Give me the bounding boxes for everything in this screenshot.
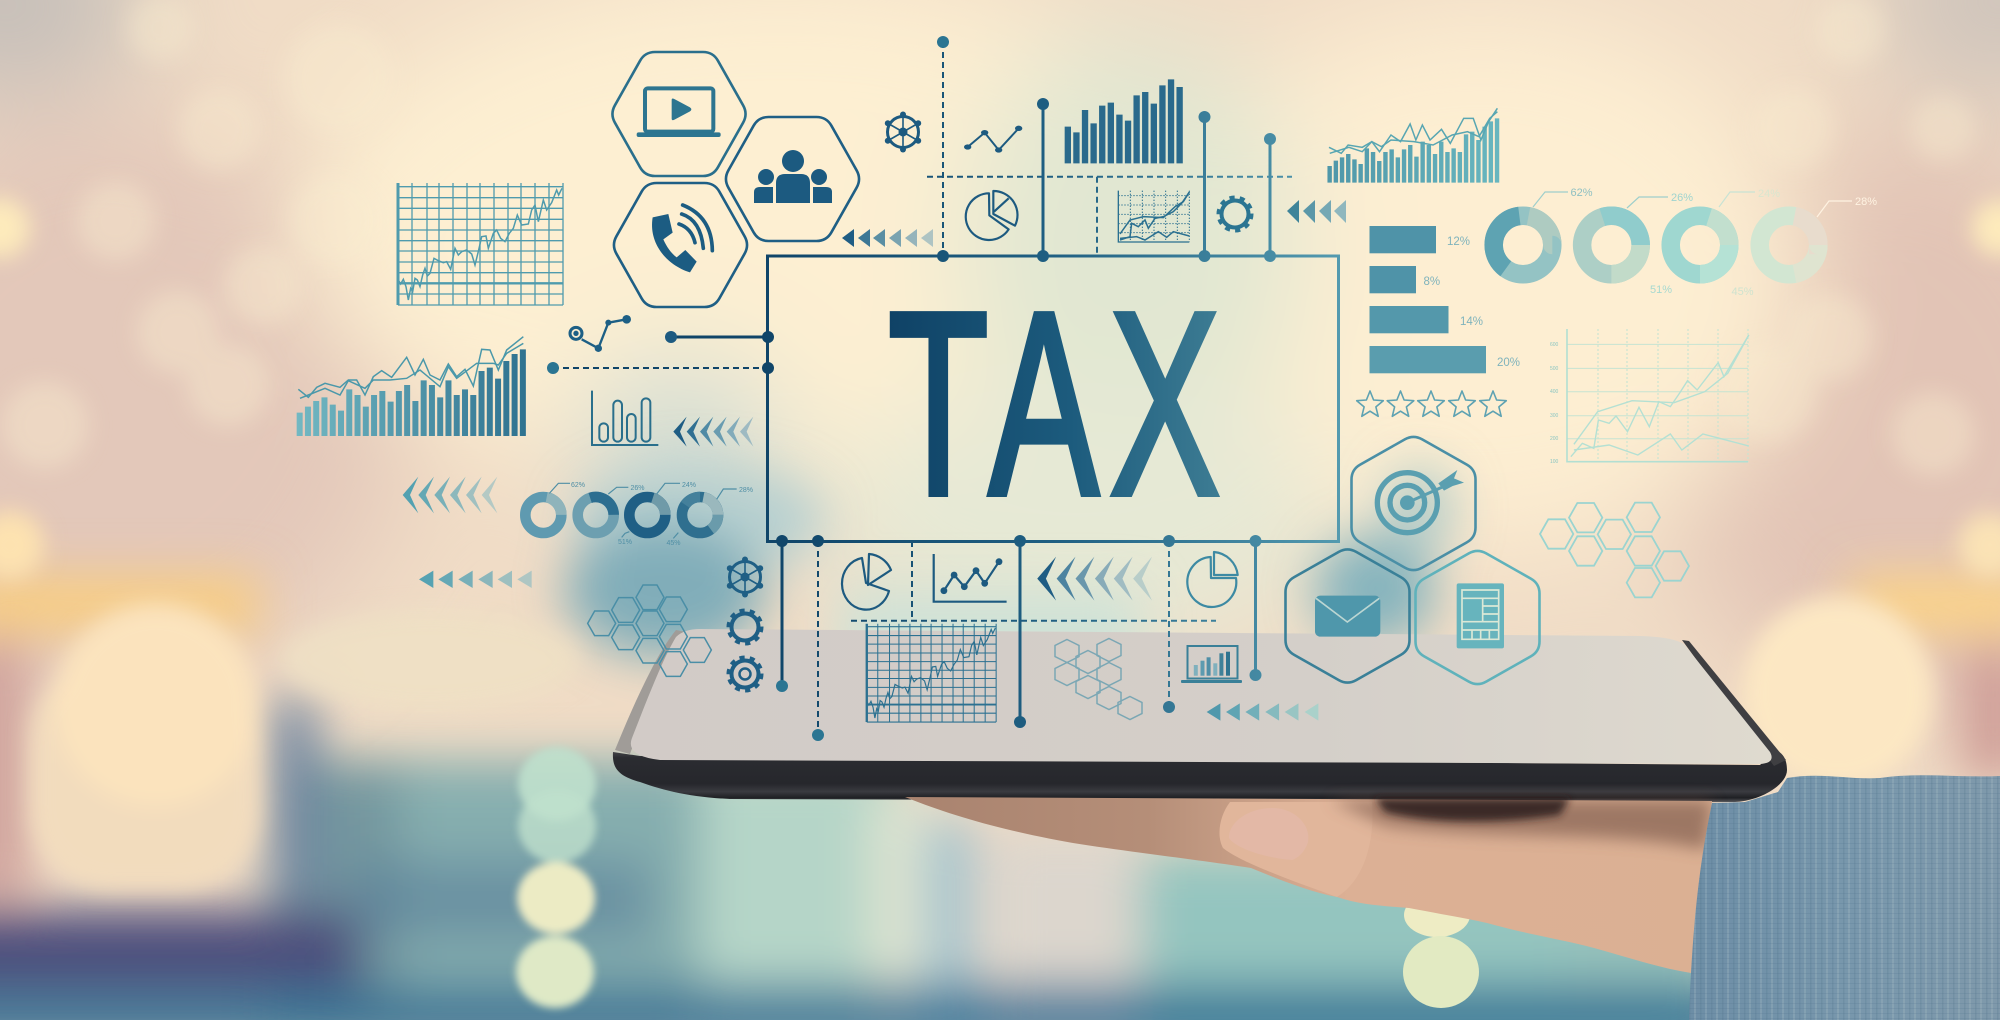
horizontal bar chart: 20% <box>1497 357 1520 369</box>
donut labels: large: 26% <box>1671 192 1693 204</box>
line chart: right: 100 <box>1550 459 1559 465</box>
hexagon cluster: right <box>1540 503 1689 597</box>
hexagon: video <box>612 52 746 176</box>
icon: wheel gear bottom <box>727 556 763 598</box>
connector end dots <box>547 36 949 741</box>
line chart: right: 600 <box>1550 342 1559 348</box>
donut labels: large: 28% <box>1855 196 1877 208</box>
donut labels: small: 28% <box>739 487 753 494</box>
icon: pie chart left on box bottom <box>842 554 891 610</box>
grid line chart: on tablet <box>867 624 996 722</box>
icon: laptop play <box>637 88 721 137</box>
bar and line chart: left <box>297 337 526 436</box>
triangles: top row <box>842 229 933 247</box>
bokeh column by the tablet <box>516 747 596 1008</box>
chevrons: far left <box>403 477 497 513</box>
donut 24% <box>629 497 665 533</box>
background wash layers <box>0 0 2000 710</box>
sleeve <box>1689 775 2000 1020</box>
donut labels: large: 45% <box>1732 286 1754 298</box>
line chart: right: 200 <box>1550 436 1559 442</box>
icon: line chart with axes <box>934 554 1007 602</box>
hexagon: tablet <box>1416 551 1540 684</box>
tablet side bezel <box>615 630 686 754</box>
background lower tones <box>0 465 2000 1020</box>
hexagon: phone <box>614 183 747 307</box>
donut labels: small: 51% <box>618 539 632 546</box>
icon: gear ring <box>728 610 762 644</box>
horizontal bar chart: 12% <box>1447 236 1470 248</box>
line chart: right <box>1550 329 1749 465</box>
icon: wheel gear top <box>885 112 921 152</box>
chevrons: on tablet <box>1037 557 1152 601</box>
donut labels: small: 45% <box>666 540 681 547</box>
hexagon cluster: tablet <box>1055 638 1142 720</box>
icon: phone handset <box>652 205 712 272</box>
icon: envelope <box>1315 596 1380 637</box>
icon: route path <box>570 315 631 352</box>
shadow under tablet <box>1375 798 1570 821</box>
tablet dark edge band <box>613 750 1787 802</box>
connector dots <box>762 98 1276 728</box>
icon: small line chart <box>964 126 1022 153</box>
donut labels: large <box>1533 187 1877 298</box>
line chart: right: 300 <box>1550 413 1559 419</box>
donut charts: large <box>1494 208 1818 282</box>
hand <box>905 797 1712 973</box>
line chart: right: 400 <box>1550 389 1559 395</box>
horizontal bar chart: 8% <box>1424 276 1440 288</box>
icon: gear with center ring <box>728 658 762 690</box>
sleeve knit texture <box>1689 775 2000 1020</box>
donut labels: small: 24% <box>682 482 696 489</box>
hexagon: target <box>1352 437 1476 570</box>
donut labels: large: 24% <box>1758 188 1780 200</box>
donut 26% <box>1574 208 1648 282</box>
line chart: right: 500 <box>1550 366 1559 372</box>
tablet right bezel <box>1682 640 1786 766</box>
donut 62% <box>1494 216 1552 274</box>
donut labels: small: 62% <box>571 482 585 489</box>
thumb <box>1219 802 1373 897</box>
icon: target with arrow <box>1377 470 1464 533</box>
triangles: top right row <box>1287 200 1346 223</box>
mini line chart <box>1118 191 1189 242</box>
TAX frame and connectors <box>547 36 1338 741</box>
donut 28% <box>682 497 718 533</box>
thumbnail <box>1229 808 1308 860</box>
donut 62% <box>525 497 561 533</box>
donut 24% <box>1671 216 1729 274</box>
triangles: on tablet <box>1207 703 1318 721</box>
hexagon: team <box>726 117 859 241</box>
hexagon cluster: left <box>588 585 711 676</box>
sleeve fabric <box>1689 775 2000 1020</box>
horizontal bar chart <box>1370 226 1520 373</box>
frame <box>768 256 1338 542</box>
icon: laptop with bars <box>1181 646 1242 683</box>
solid connectors <box>671 104 1270 722</box>
chevrons: left of box <box>673 417 753 447</box>
graphics overlay <box>297 36 1877 741</box>
bar and line chart: top right <box>1327 108 1499 183</box>
dashed connectors <box>553 42 1292 735</box>
hexagon: mail <box>1286 549 1410 683</box>
icon: rounded bar chart <box>592 391 658 445</box>
grid line chart: upper left <box>398 183 563 305</box>
icon: people <box>754 150 832 203</box>
donut labels: large: 51% <box>1650 284 1672 296</box>
five star rating <box>1357 391 1506 416</box>
donut labels: small <box>549 482 753 547</box>
tablet screen <box>631 629 1772 764</box>
bokeh ellipses by the hand <box>1403 893 1479 1008</box>
triangles: left row <box>419 571 532 588</box>
shading under tablet <box>1330 800 1712 850</box>
icon: mini tablet <box>1457 583 1504 648</box>
donut labels: small: 26% <box>630 485 645 492</box>
bar chart: top center <box>1065 79 1183 163</box>
donut labels: large: 62% <box>1570 187 1593 199</box>
icon: pie chart right on box bottom <box>1187 552 1238 607</box>
icon: pie chart top <box>966 191 1017 240</box>
icon: gear top right <box>1218 198 1252 230</box>
donut 26% <box>573 492 618 538</box>
tablet <box>613 629 1787 802</box>
donut charts: small <box>525 492 718 538</box>
horizontal bar chart: 14% <box>1460 316 1483 328</box>
donut 28% <box>1760 216 1818 274</box>
title: TAX: TAX <box>888 259 1219 550</box>
palm and wrist <box>905 797 1712 973</box>
